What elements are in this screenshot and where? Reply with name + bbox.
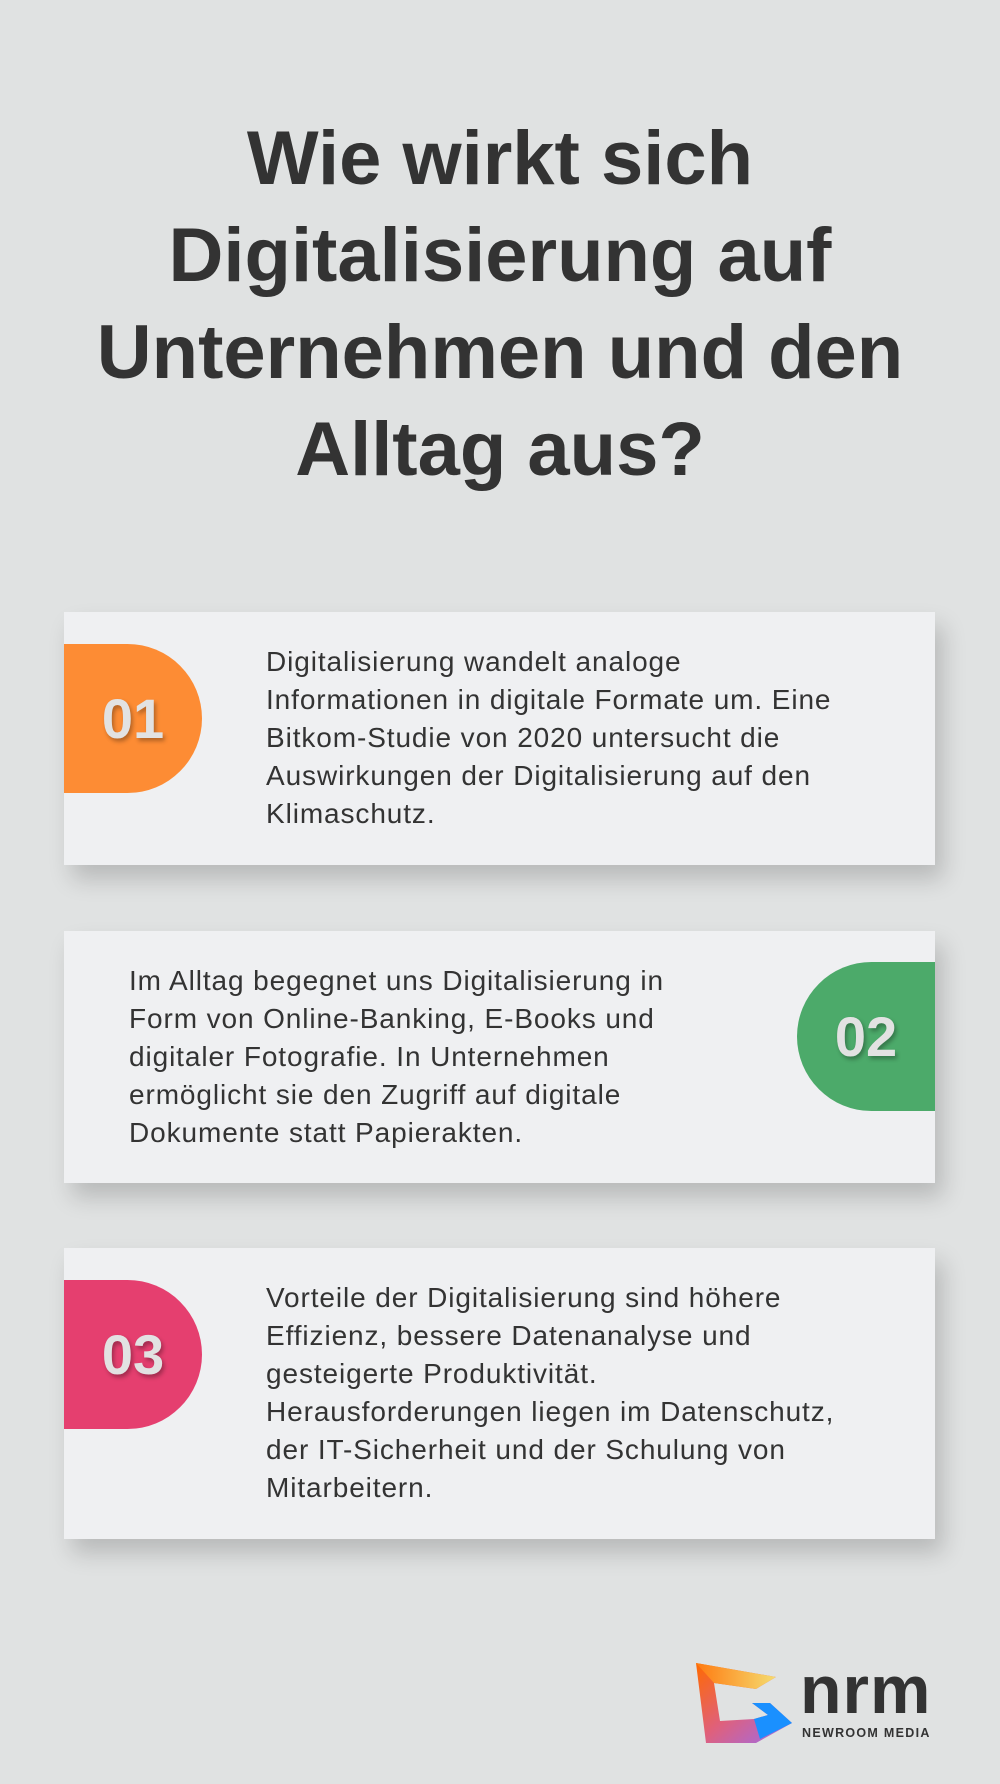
- panel: card 3: [64, 1248, 935, 1539]
- text 3: Herausforderungen liegen im Datenschutz,: [266, 1396, 834, 1427]
- text 3: gesteigerte Produktivität.: [266, 1358, 598, 1389]
- text 2: ermöglicht sie den Zugriff auf digitale: [129, 1079, 621, 1110]
- badge 03: 03: [102, 1323, 164, 1386]
- text 2: Im Alltag begegnet uns Digitalisierung in: [129, 965, 664, 996]
- text 1: Bitkom-Studie von 2020 untersucht die: [266, 722, 780, 753]
- title: Wie wirkt sich: [247, 116, 753, 201]
- title: Digitalisierung auf: [169, 213, 831, 298]
- text 3: Effizienz, bessere Datenanalyse und: [266, 1320, 752, 1351]
- icon: logo mark: [696, 1663, 792, 1743]
- text 1: Auswirkungen der Digitalisierung auf den: [266, 760, 811, 791]
- logo text: nrm: [800, 1652, 931, 1728]
- text 2: digitaler Fotografie. In Unternehmen: [129, 1041, 610, 1072]
- title: [97, 116, 903, 492]
- text 3: Mitarbeitern.: [266, 1472, 433, 1503]
- text 1: Informationen in digitale Formate um. Eine: [266, 684, 831, 715]
- text 2: [129, 965, 664, 1148]
- text 3: Vorteile der Digitalisierung sind höhere: [266, 1282, 781, 1313]
- text 3: der IT-Sicherheit und der Schulung von: [266, 1434, 786, 1465]
- badge 01: [64, 644, 202, 793]
- title: Alltag aus?: [295, 407, 705, 492]
- panel: card 1: [64, 612, 935, 865]
- panel: card 2: [64, 931, 935, 1183]
- logo: NEWROOM MEDIA: [802, 1726, 931, 1740]
- text 1: Digitalisierung wandelt analoge: [266, 646, 681, 677]
- logo: [696, 1652, 931, 1743]
- title: Unternehmen und den: [97, 310, 903, 395]
- text 2: Dokumente statt Papierakten.: [129, 1117, 523, 1148]
- text 3: [266, 1282, 834, 1503]
- text 2: Form von Online-Banking, E-Books und: [129, 1003, 655, 1034]
- badge 01: 01: [102, 687, 164, 750]
- badge 03: [64, 1280, 202, 1429]
- text 1: [266, 646, 831, 829]
- text 1: Klimaschutz.: [266, 798, 436, 829]
- badge 02: 02: [835, 1005, 897, 1068]
- badge 02: [797, 962, 935, 1111]
